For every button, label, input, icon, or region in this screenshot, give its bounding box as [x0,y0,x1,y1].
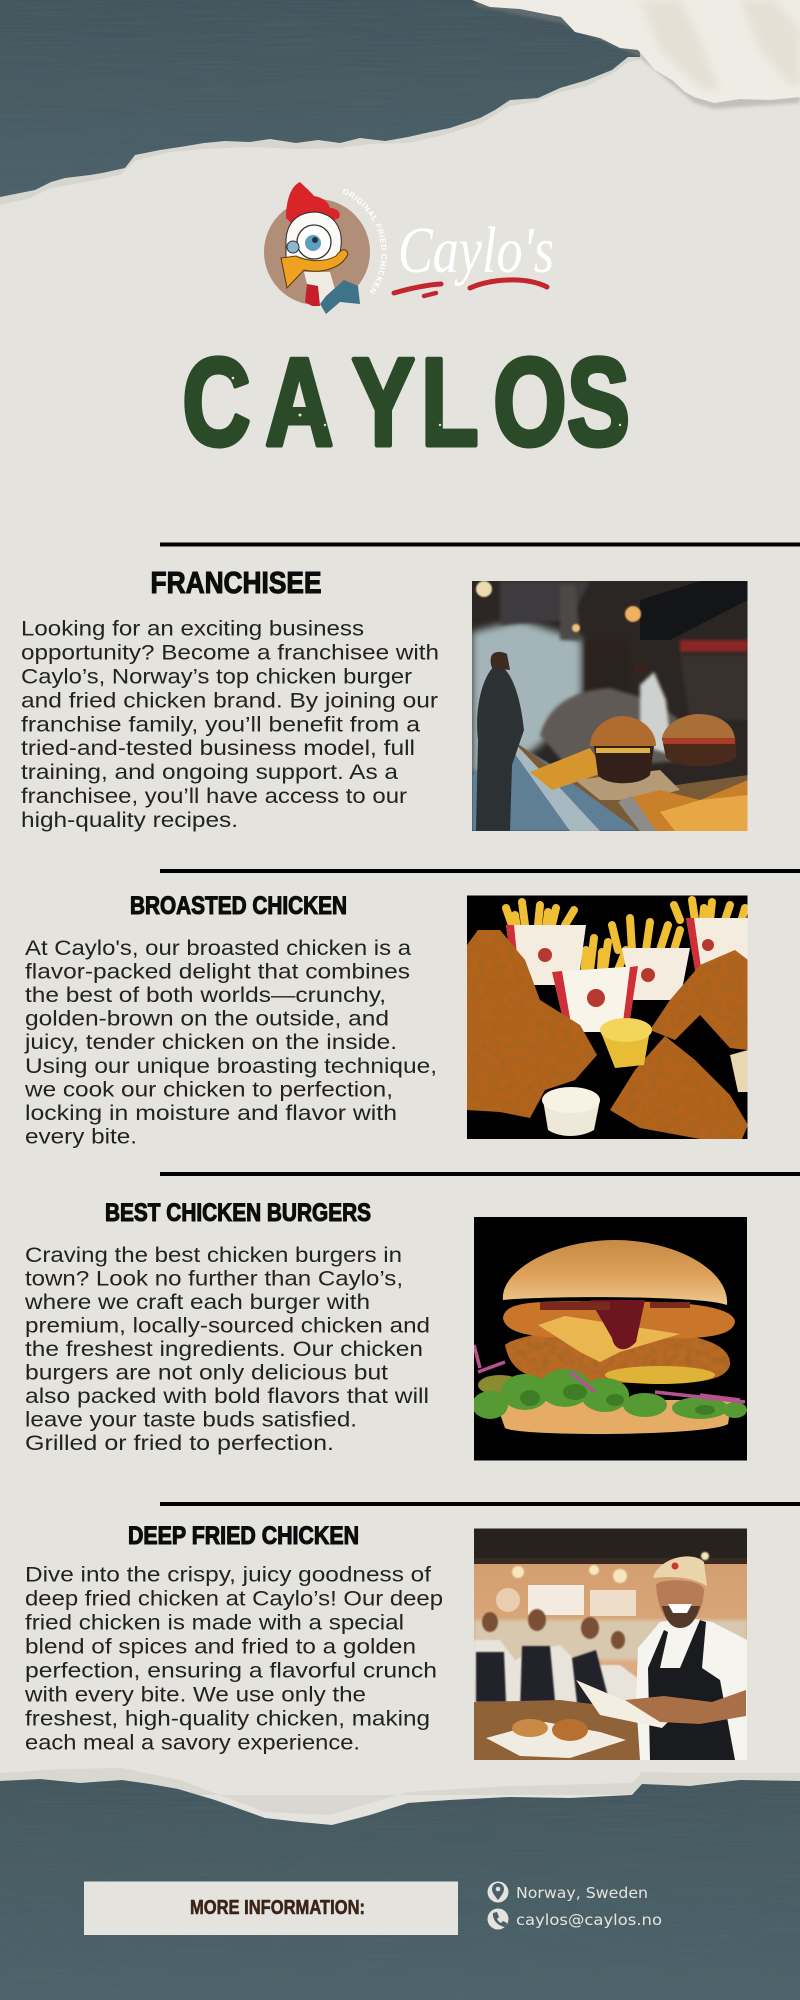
footer [84,1882,662,1935]
body text: Craving the best chicken burgers in [25,1244,402,1267]
body text [24,1564,443,1754]
body text [24,1244,430,1455]
body text: Using our unique broasting technique, [25,1055,437,1078]
logo [264,182,554,314]
body text: At Caylo's, our broasted chicken is a [25,937,411,960]
ring text: ORIGINAL FRIED CHICKEN [343,188,387,294]
wordmark: Caylo's [398,214,554,287]
heading: FRANCHISEE [150,565,322,600]
heading: BROASTED CHICKEN [130,892,347,920]
body text: Dive into the crispy, juicy goodness of [25,1564,431,1586]
body text: deep fried chicken at Caylo’s! Our deep [25,1588,443,1610]
photo: chicken burger [472,1217,747,1461]
photo: smiling staff member [474,1528,747,1760]
body text: golden-brown on the outside, and [25,1008,389,1030]
body text: leave your taste buds satisfied. [25,1408,357,1432]
body text: Caylo’s, Norway’s top chicken burger [21,666,412,688]
body text: each meal a savory experience. [25,1732,360,1754]
body text: flavor-packed delight that combines [25,960,410,984]
body text: franchise family, you’ll benefit from a [21,714,420,736]
body text: tried-and-tested business model, full [21,737,415,760]
title: CAYLOS [182,334,630,472]
photo: restaurant counter with burgers [472,581,748,831]
more information box: MORE INFORMATION: [190,1897,365,1919]
section: franchisee [21,542,800,832]
body text: with every bite. We use only the [24,1684,366,1706]
body text: also packed with bold flavors that will [25,1385,429,1408]
body text: town? Look no further than Caylo’s, [25,1268,403,1290]
more information box [84,1882,458,1935]
body text: freshest, high-quality chicken, making [25,1708,430,1730]
red swooshes [394,280,547,296]
body text: franchisee, you’ll have access to our [21,785,407,808]
body text: juicy, tender chicken on the inside. [24,1031,397,1054]
contact: location [488,1882,648,1902]
torn white paper: top right [472,0,800,109]
fries, back boxes [502,896,748,970]
photo: fried chicken and fries [467,896,748,1140]
body text: perfection, ensuring a flavorful crunch [25,1660,437,1682]
body text: premium, locally-sourced chicken and [25,1314,430,1338]
section: deep fried chicken [24,1502,800,1760]
body text: we cook our chicken to perfection, [24,1078,393,1102]
body text: burgers are not only delicious but [25,1362,388,1384]
body text: where we craft each burger with [24,1291,370,1314]
body text: opportunity? Become a franchisee with [21,642,439,664]
heading: BEST CHICKEN BURGERS [105,1199,371,1227]
section: broasted chicken [24,869,800,1148]
contact: email: caylos@caylos.no [516,1911,662,1929]
body text: Looking for an exciting business [21,618,364,640]
section: best chicken burgers [24,1172,800,1461]
icon: rooster mascot [264,182,370,314]
contact: email [488,1908,662,1930]
body text: training, and ongoing support. As a [21,761,398,784]
body text: fried chicken is made with a special [25,1612,404,1634]
torn dark paper: bottom [0,1768,800,2000]
body text: locking in moisture and flavor with [25,1102,397,1125]
body text: and fried chicken brand. By joining our [21,690,438,712]
body text: every bite. [25,1126,137,1148]
body text: Grilled or fried to perfection. [25,1432,334,1455]
torn dark paper: top [0,0,640,205]
heading: DEEP FRIED CHICKEN [128,1522,359,1550]
contact: location: Norway, Sweden [516,1884,648,1902]
body text: blend of spices and fried to a golden [25,1636,416,1658]
body text [21,618,439,832]
body text: high-quality recipes. [21,809,238,832]
body text: the freshest ingredients. Our chicken [25,1338,423,1361]
body text [24,937,437,1148]
body text: the best of both worlds—crunchy, [25,984,386,1007]
